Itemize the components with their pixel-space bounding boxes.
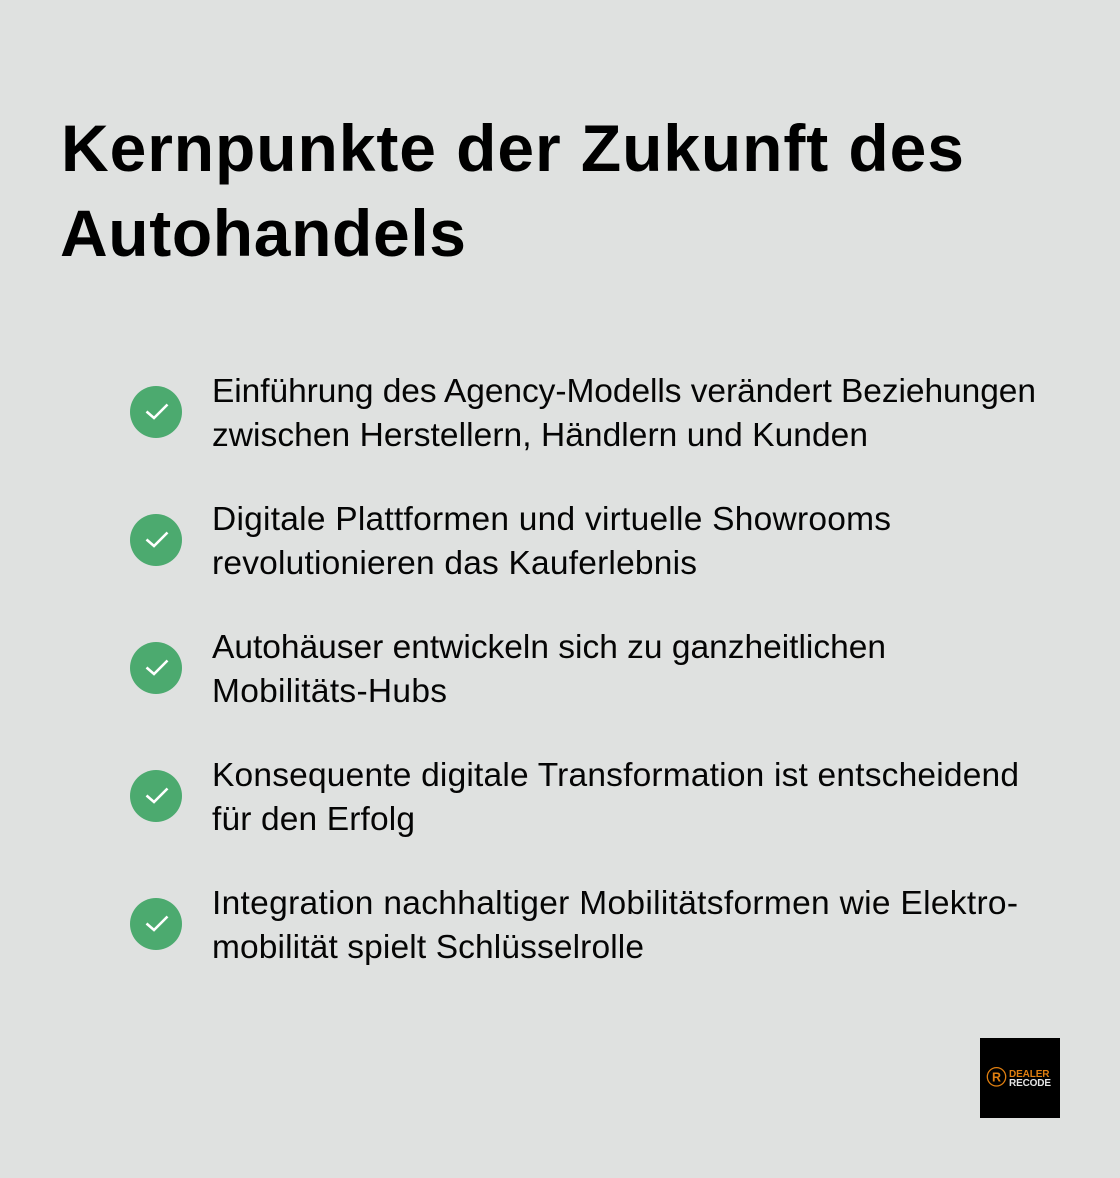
logo: Dealer Recode (980, 1038, 1060, 1118)
text: item 4: Konsequente digitale Transformation ist entscheidend (212, 757, 1019, 794)
text: item 3: Autohäuser entwickeln sich zu ganzheitlichen (212, 629, 886, 666)
logo: Dealer Recode: RECODE (1009, 1078, 1051, 1089)
text: item 2: revolutionieren das Kauferlebnis (212, 545, 697, 582)
icon: check 2 (130, 514, 182, 566)
text: item 1 (212, 373, 1036, 454)
logo: Dealer Recode: DEALER (1009, 1069, 1050, 1080)
list item 5 (130, 885, 1018, 966)
text: item 2: Digitale Plattformen und virtuelle Showrooms (212, 501, 891, 538)
logo: Dealer Recode: R (992, 1070, 1001, 1084)
list item 4 (130, 757, 1019, 838)
list of key points (130, 373, 1036, 966)
list item 2 (130, 501, 891, 582)
text: item 3: Mobilitäts-Hubs (212, 673, 447, 710)
icon: check 3 (130, 642, 182, 694)
icon: check 1 (130, 386, 182, 438)
text: item 5: mobilität spielt Schlüsselrolle (212, 929, 644, 966)
list item 3 (130, 629, 886, 710)
icon: check 4 (130, 770, 182, 822)
text: item 2 (212, 501, 891, 582)
text: item 3 (212, 629, 886, 710)
list item 1 (130, 373, 1036, 454)
text: item 5 (212, 885, 1018, 966)
title: Autohandels (60, 196, 466, 270)
text: item 5: Integration nachhaltiger Mobilitätsformen wie Elektro- (212, 885, 1018, 922)
title (60, 111, 964, 270)
text: item 4 (212, 757, 1019, 838)
text: item 4: für den Erfolg (212, 801, 415, 838)
text: item 1: Einführung des Agency-Modells verändert Beziehungen (212, 373, 1036, 410)
icon: check 5 (130, 898, 182, 950)
text: item 1: zwischen Herstellern, Händlern und Kunden (212, 417, 868, 454)
title: Kernpunkte der Zukunft des (61, 111, 964, 185)
